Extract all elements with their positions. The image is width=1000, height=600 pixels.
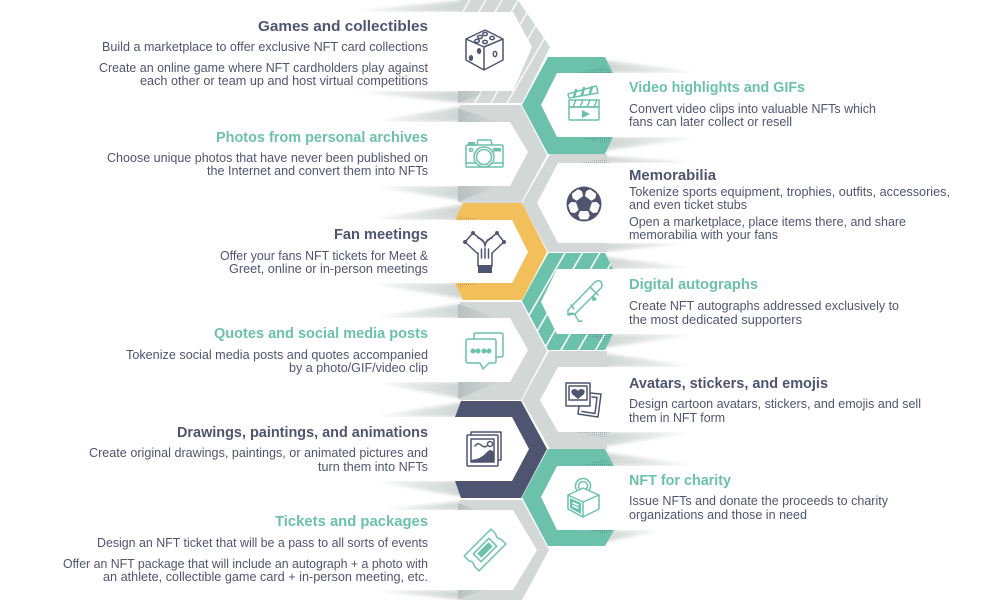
- hexagon frame: avatars: [522, 351, 607, 449]
- text: video description: fans can later collect or resell: [629, 115, 792, 129]
- text: quotes description: by a photo/GIF/video clip: [289, 361, 428, 375]
- text: charity description: Issue NFTs and donate the proceeds to charity: [629, 494, 889, 508]
- text: fan meetings description: Offer your fans NFT tickets for Meet &: [220, 249, 429, 263]
- title: memorabilia: Memorabilia: [629, 168, 717, 184]
- title: tickets and packages: Tickets and packages: [275, 514, 428, 530]
- hexagon frame: fan meetings: [455, 203, 547, 300]
- text: memorabilia description: and even ticket stubs: [629, 198, 747, 212]
- text: quotes description: Tokenize social media posts and quotes accompanied: [126, 348, 428, 362]
- icon: ticket: [464, 529, 506, 571]
- text: autographs description: the most dedicated supporters: [629, 313, 802, 327]
- panel: NFT for charity: [522, 449, 1000, 546]
- icon: clapperboard: [568, 86, 599, 120]
- text: charity description: organizations and those in need: [629, 508, 807, 522]
- panel: games and collectibles: [0, 0, 550, 103]
- text: avatars description: them in NFT form: [629, 411, 725, 425]
- panel: fan meetings: [0, 203, 547, 300]
- panel: memorabilia: [522, 154, 1000, 252]
- text: games description: Create an online game where NFT cardholders play against: [99, 61, 429, 75]
- text: tickets description: Offer an NFT package that will include an autograph + a photo with: [63, 557, 428, 571]
- title: drawings, paintings, and animations: Drawings, paintings, and animations: [177, 425, 428, 441]
- icon: pen: [568, 281, 602, 321]
- panel: digital autographs: [522, 253, 1000, 350]
- text: games description: Build a marketplace to offer exclusive NFT card collections: [102, 40, 428, 54]
- text: photos description: the Internet and convert them into NFTs: [207, 164, 428, 178]
- icon: stickers: [566, 383, 601, 417]
- text: memorabilia description: [629, 185, 950, 242]
- icon: joined hands: [464, 232, 505, 273]
- hexagon frame: charity: [522, 449, 614, 546]
- title: avatars, stickers, and emojis: Avatars, stickers, and emojis: [629, 376, 828, 392]
- text: avatars description: Design cartoon avatars, stickers, and emojis and sell: [629, 397, 921, 411]
- icon: chat bubbles: [466, 333, 503, 369]
- icon: dice: [466, 30, 503, 70]
- text: drawings description: [89, 446, 428, 474]
- title: video highlights and GIFs: Video highlights and GIFs: [629, 80, 805, 96]
- text: avatars description: [629, 397, 921, 425]
- hexagon frame: digital autographs: [522, 253, 613, 350]
- text: memorabilia description: memorabilia with your fans: [629, 228, 778, 242]
- hexagon frame: photos: [460, 105, 547, 203]
- text: fan meetings description: Greet, online or in-person meetings: [229, 262, 428, 276]
- hexagon frame: drawings: [455, 401, 547, 498]
- panel: avatars, stickers, and emojis: [522, 351, 1000, 449]
- icon: donation box: [568, 478, 599, 517]
- hexagon frame: quotes: [460, 302, 547, 400]
- title: fan meetings: Fan meetings: [334, 227, 428, 243]
- text: games description: each other or team up and host virtual competitions: [140, 74, 428, 88]
- hexagon frame: tickets: [460, 500, 549, 600]
- text: memorabilia description: Open a marketplace, place items there, and share: [629, 215, 906, 229]
- text: tickets description: [63, 536, 428, 584]
- panel: quotes and social media posts: [0, 302, 547, 400]
- panel: photos from personal archives: [0, 105, 547, 203]
- panel: drawings, paintings, and animations: [0, 401, 547, 498]
- hexagon frame: memorabilia: [522, 154, 607, 252]
- title: games and collectibles: Games and collectibles: [258, 19, 428, 35]
- icon: picture frames: [467, 432, 501, 466]
- text: photos description: [107, 151, 428, 178]
- icon: camera: [466, 140, 503, 167]
- hexagon frame: video: [522, 57, 613, 154]
- text: memorabilia description: Tokenize sports equipment, trophies, outfits, accessories,: [629, 185, 950, 199]
- text: autographs description: [629, 299, 899, 327]
- icon: soccer ball: [566, 186, 602, 222]
- title: quotes and social media posts: Quotes and social media posts: [214, 326, 428, 342]
- title: NFT for charity: NFT for charity: [629, 473, 731, 489]
- text: games description: [99, 40, 429, 88]
- hexagon frame: games: [460, 0, 550, 103]
- text: autographs description: Create NFT autographs addressed exclusively to: [629, 299, 899, 313]
- panel: tickets and packages: [0, 500, 549, 600]
- text: video description: Convert video clips into valuable NFTs which: [629, 102, 876, 116]
- panel: video highlights and GIFs: [522, 57, 1000, 154]
- text: drawings description: Create original drawings, paintings, or animated pictures and: [89, 446, 428, 460]
- text: tickets description: an athlete, collectible game card + in-person meeting, etc.: [103, 570, 428, 584]
- text: quotes description: [126, 348, 428, 375]
- title: photos from personal archives: Photos from personal archives: [216, 130, 428, 146]
- text: photos description: Choose unique photos that have never been published on: [107, 151, 428, 165]
- text: tickets description: Design an NFT ticket that will be a pass to all sorts of events: [97, 536, 428, 550]
- text: fan meetings description: [220, 249, 429, 276]
- text: video description: [629, 102, 876, 129]
- text: drawings description: turn them into NFTs: [318, 460, 428, 474]
- title: digital autographs: Digital autographs: [629, 277, 758, 293]
- text: charity description: [629, 494, 889, 522]
